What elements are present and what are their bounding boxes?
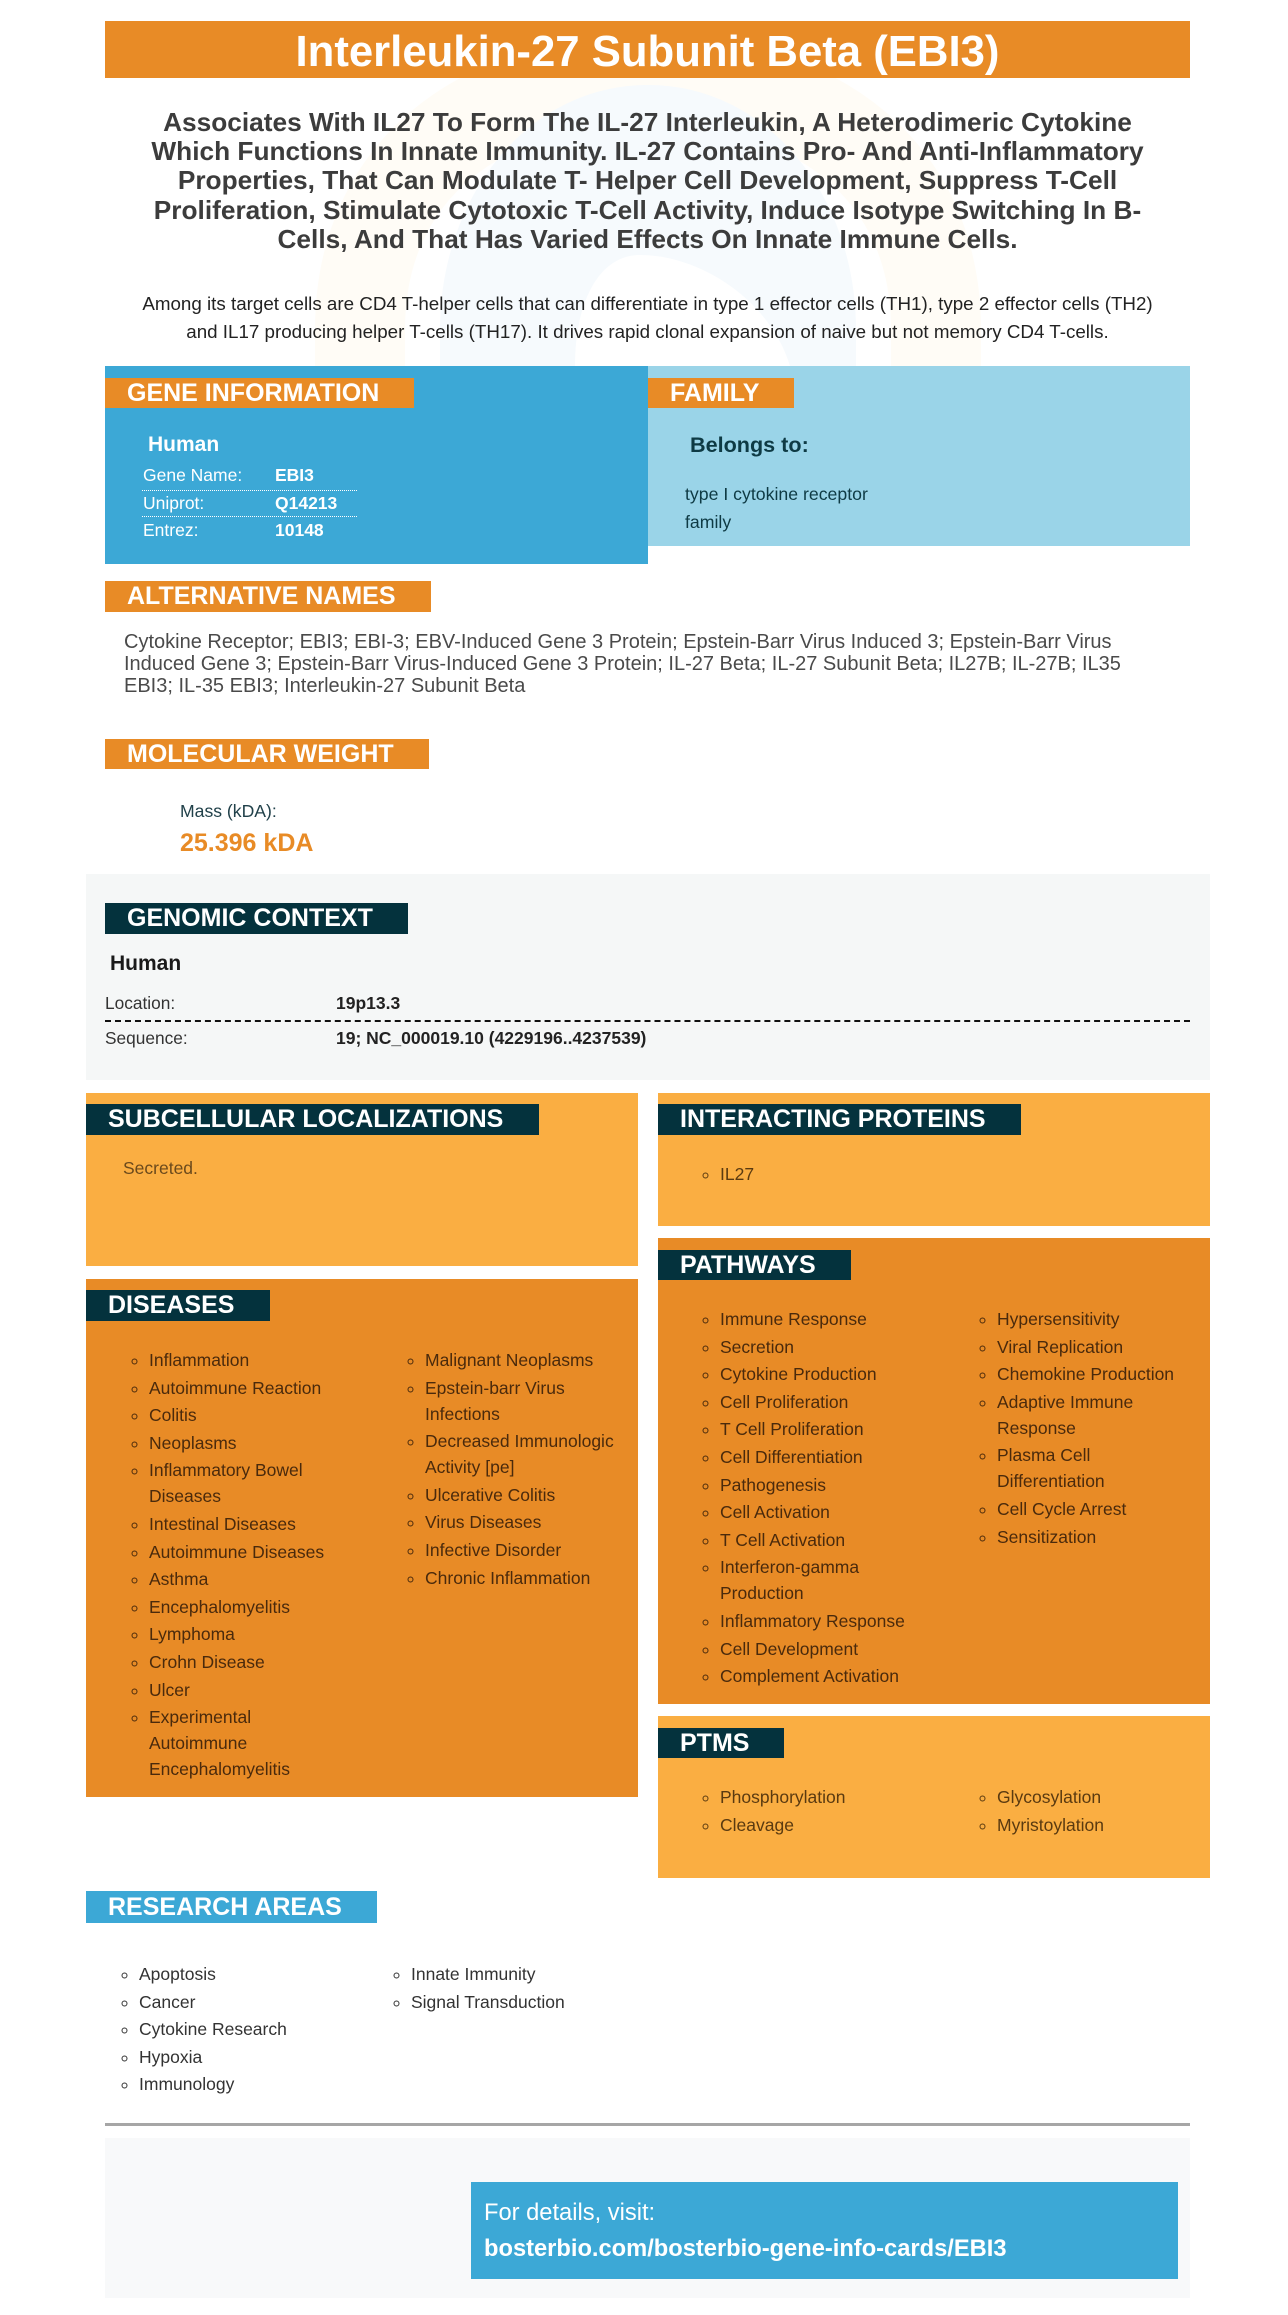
panel: footer [105,2138,1190,2298]
summary heading: Which Functions In Innate Immunity. IL-27 Contains Pro- And Anti-Inflammatory [151,136,1144,166]
mass value: 25.396 kDA [180,829,313,857]
research areas list column 2 [394,1964,565,2012]
diseases list column 2: Infective Disorder [425,1540,561,1560]
ptms list column 2: Glycosylation [997,1787,1101,1807]
ptms list column 1: Cleavage [720,1815,794,1835]
summary heading [151,107,1144,254]
call to action label: For details, visit: [484,2200,655,2226]
diseases list column 1: Experimental [149,1707,251,1727]
diseases list column 1: Autoimmune Diseases [149,1542,324,1562]
mass label: Mass (kDA): [180,801,277,821]
panel: diseases [86,1279,638,1797]
panel: pathways [658,1238,1210,1704]
diseases list column 2: Decreased Immunologic [425,1431,614,1451]
entrez row: 10148 [275,520,324,540]
diseases list column 1: Encephalomyelitis [149,1597,290,1617]
divider rule [105,2123,1190,2126]
gene name row: EBI3 [275,465,314,485]
diseases list column 1: Encephalomyelitis [149,1759,290,1779]
pathways list column 2: Sensitization [997,1527,1096,1547]
diseases list column 2: Infections [425,1404,500,1424]
diseases list column 2: Activity [pe] [425,1457,514,1477]
heading: research areas: RESEARCH AREAS [108,1893,342,1921]
diseases list column 1: Intestinal Diseases [149,1514,296,1534]
interacting proteins list: IL27 [720,1164,754,1184]
diseases list column 1: Inflammation [149,1350,249,1370]
diseases list column 2 [408,1350,614,1588]
pathways list column 2: Cell Cycle Arrest [997,1499,1126,1519]
uniprot row: Uniprot: [143,493,204,513]
diseases list column 1: Autoimmune [149,1733,247,1753]
location row [105,990,1190,1022]
heading: ptms [658,1728,784,1758]
heading: alternative names: ALTERNATIVE NAMES [127,582,396,610]
family text: type I cytokine receptor [685,484,868,504]
diseases list column 1: Ulcer [149,1680,190,1700]
family text [685,484,868,532]
panel: interacting proteins [658,1093,1210,1226]
heading: diseases [86,1290,270,1321]
localization text: Secreted. [123,1158,198,1178]
summary heading: Proliferation, Stimulate Cytotoxic T-Cell Activity, Induce Isotype Switching In B- [154,195,1141,225]
pathways list column 2: Adaptive Immune [997,1392,1133,1412]
pathways list column 1: Cell Proliferation [720,1392,848,1412]
research areas list column 2: Signal Transduction [411,1992,565,2012]
pathways list column 1: Cell Development [720,1639,858,1659]
research areas list column 2: Innate Immunity [411,1964,536,1984]
alternative names text: EBI3; IL-35 EBI3; Interleukin-27 Subunit Beta [124,675,525,697]
diseases list column 1: Crohn Disease [149,1652,265,1672]
pathways list column 1: Production [720,1583,804,1603]
pathways list column 2: Differentiation [997,1471,1105,1491]
sequence row [105,1028,646,1048]
pathways list column 2: Plasma Cell [997,1445,1090,1465]
heading: family [648,378,794,408]
title banner: Interleukin-27 Subunit Beta (EBI3) [296,27,999,76]
ptms list column 1 [702,1787,846,1835]
diseases list column 1: Colitis [149,1405,197,1425]
diseases list column 1: Inflammatory Bowel [149,1460,303,1480]
pathways list column 2: Chemokine Production [997,1364,1174,1384]
ptms list column 1: Phosphorylation [720,1787,846,1807]
family text: family [685,512,731,532]
sequence row: 19; NC_000019.10 (4229196..4237539) [336,1028,646,1048]
title banner [105,21,1190,78]
uniprot row: Q14213 [275,493,337,513]
pathways list column 1: Pathogenesis [720,1475,826,1495]
pathways list column 1: Complement Activation [720,1666,899,1686]
pathways list column 1 [702,1309,905,1686]
call to action box [471,2182,1178,2279]
research areas list column 1: Immunology [139,2074,234,2094]
gene name row: Gene Name: [143,465,242,485]
pathways list column 2: Hypersensitivity [997,1309,1120,1329]
heading: ptms: PTMS [680,1729,749,1757]
description paragraph: and IL17 producing helper T-cells (TH17). It drives rapid clonal expansion of naive but not memory CD4 T-cells. [186,321,1109,342]
pathways list column 1: Cell Differentiation [720,1447,863,1467]
sequence row: Sequence: [105,1028,188,1048]
research areas list column 1: Cytokine Research [139,2019,287,2039]
call to action url: bosterbio.com/bosterbio-gene-info-cards/EBI3 [484,2236,1007,2262]
description paragraph: Among its target cells are CD4 T-helper cells that can differentiate in type 1 effector cells (TH1), type 2 effector cells (TH2) [142,293,1153,314]
entrez row [143,520,324,540]
heading: subcellular localizations: SUBCELLULAR LOCALIZATIONS [108,1105,503,1133]
pathways list column 1: Inflammatory Response [720,1611,905,1631]
diseases list column 1 [132,1350,324,1779]
pathways list column 2: Viral Replication [997,1337,1123,1357]
gene name row [142,462,357,491]
pathways list column 1: T Cell Proliferation [720,1419,864,1439]
research areas list column 1: Cancer [139,1992,195,2012]
diseases list column 2: Ulcerative Colitis [425,1485,555,1505]
diseases list column 2: Chronic Inflammation [425,1568,590,1588]
heading: interacting proteins: INTERACTING PROTEINS [680,1105,986,1133]
pathways list column 1: Secretion [720,1337,794,1357]
ptms list column 2 [980,1787,1104,1835]
description paragraph [142,293,1153,342]
diseases list column 1: Neoplasms [149,1433,237,1453]
diseases list column 1: Diseases [149,1486,221,1506]
pathways list column 1: Cytokine Production [720,1364,877,1384]
heading: molecular weight: MOLECULAR WEIGHT [127,740,394,768]
heading: gene information: GENE INFORMATION [127,379,379,407]
diseases list column 2: Epstein-barr Virus [425,1378,565,1398]
research areas list column 1: Apoptosis [139,1964,216,1984]
alternative names text: Induced Gene 3; Epstein-Barr Virus-Induced Gene 3 Protein; IL-27 Beta; IL-27 Subunit Beta; IL27B; IL-27B; IL35 [124,653,1121,675]
heading: genomic context: GENOMIC CONTEXT [127,904,373,932]
ptms list column 2: Myristoylation [997,1815,1104,1835]
uniprot row [142,490,357,517]
diseases list column 2: Malignant Neoplasms [425,1350,593,1370]
pathways list column 2 [980,1309,1174,1547]
pathways list column 1: Cell Activation [720,1502,830,1522]
panel: ptms [658,1716,1210,1878]
summary heading: Associates With IL27 To Form The IL-27 Interleukin, A Heterodimeric Cytokine [163,107,1132,137]
heading: family: FAMILY [670,379,759,407]
diseases list column 2: Virus Diseases [425,1512,541,1532]
summary heading: Properties, That Can Modulate T- Helper Cell Development, Suppress T-Cell [178,165,1117,195]
heading: pathways: PATHWAYS [680,1251,816,1279]
heading: diseases: DISEASES [108,1291,234,1319]
species label: Human [148,433,219,456]
summary heading: Cells, And That Has Varied Effects On Innate Immune Cells. [277,224,1018,254]
panel: family [648,366,1190,546]
location row: 19p13.3 [336,993,400,1013]
pathways list column 1: Immune Response [720,1309,867,1329]
entrez row: Entrez: [143,520,198,540]
panel: genomic context [86,874,1210,1080]
diseases list column 1: Asthma [149,1569,208,1589]
panel: gene information [105,366,648,564]
pathways list column 2: Response [997,1418,1076,1438]
alternative names text: Cytokine Receptor; EBI3; EBI-3; EBV-Induced Gene 3 Protein; Epstein-Barr Virus Induced 3; Epstein-Barr Virus [124,631,1112,653]
heading: pathways [658,1250,851,1280]
research areas list column 1 [122,1964,287,2094]
pathways list column 1: Interferon-gamma [720,1557,859,1577]
belongs to label: Belongs to: [690,432,809,457]
research areas list column 1: Hypoxia [139,2047,202,2067]
background watermark logo [315,78,981,366]
location row: Location: [105,993,175,1013]
pathways list column 1: T Cell Activation [720,1530,845,1550]
diseases list column 1: Autoimmune Reaction [149,1378,321,1398]
alternative names text [124,631,1121,697]
species label: Human [110,952,181,975]
diseases list column 1: Lymphoma [149,1624,235,1644]
panel: subcellular localizations [86,1093,638,1266]
